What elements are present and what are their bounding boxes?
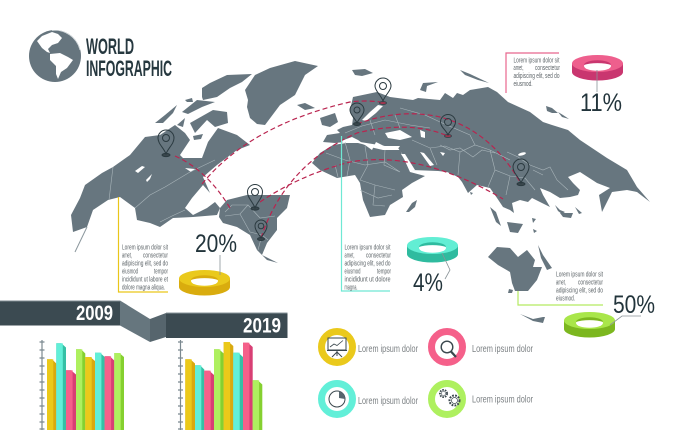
legend item: chart bbox=[322, 384, 418, 414]
bar chart: 2009 bbox=[40, 340, 124, 430]
map: borders bbox=[109, 108, 568, 250]
text block: teal callout: Lorem ipsum dolor sit bbox=[344, 244, 391, 252]
text block: teal callout: tempor bbox=[377, 268, 391, 276]
text block: pink callout: amet, bbox=[514, 65, 524, 72]
text block: yellow callout: consectetur bbox=[143, 252, 168, 260]
text block: green callout: eiusmod. bbox=[556, 296, 575, 302]
yellow callout frame bbox=[118, 197, 168, 292]
text block: teal callout bbox=[344, 244, 391, 292]
pin: China bbox=[513, 159, 529, 186]
text block: yellow callout: tempor bbox=[154, 268, 168, 276]
text block: yellow callout: adipiscing elit, sed do bbox=[122, 260, 168, 268]
legend item: chart: Lorem ipsum dolor bbox=[358, 395, 418, 407]
text block: green callout: Lorem ipsum dolor sit bbox=[556, 272, 603, 278]
stat: 4% teal ring: 4% bbox=[413, 269, 443, 297]
text block: pink callout: Lorem ipsum dolor sit bbox=[514, 58, 560, 64]
text block: yellow callout: amet, bbox=[122, 252, 132, 260]
legend item: settings bbox=[432, 384, 533, 414]
icon: magnifier bbox=[432, 332, 462, 362]
icon: gears bbox=[432, 384, 462, 414]
icon: presentation board bbox=[322, 332, 352, 362]
map: inland seas bbox=[135, 105, 526, 182]
stat: 50% green ring: 50% bbox=[613, 291, 655, 319]
text block: yellow callout: Lorem ipsum dolor sit bbox=[122, 244, 168, 252]
text block: yellow callout bbox=[122, 244, 168, 292]
legend item: settings: Lorem ipsum dolor bbox=[472, 394, 533, 406]
text block: teal callout: amet, bbox=[344, 252, 355, 260]
world map bbox=[71, 61, 650, 323]
pin: Scandinavia bbox=[375, 78, 391, 104]
timeline ribbon bbox=[0, 300, 288, 342]
pin: Western Europe bbox=[350, 103, 364, 126]
text block: yellow callout: incididunt ut labore et bbox=[122, 276, 168, 284]
green callout frame bbox=[518, 291, 603, 305]
bar chart: 2019 bbox=[178, 340, 262, 430]
icon: globe bbox=[29, 30, 81, 82]
text block: teal callout: magna. bbox=[344, 284, 358, 292]
legend item: search: Lorem ipsum dolor bbox=[472, 343, 533, 355]
label: 2009: 2009 bbox=[76, 302, 113, 325]
stat: 11% pink ring: 11% bbox=[580, 89, 622, 117]
chart axis bbox=[178, 340, 183, 430]
stat: 11% pink ring bbox=[572, 55, 623, 117]
text block: teal callout: eiusmod bbox=[344, 268, 361, 276]
text block: teal callout: consectetur bbox=[366, 252, 391, 260]
ribbon: 2009 band bbox=[0, 300, 120, 326]
stat: 4% teal ring bbox=[407, 237, 458, 297]
text block: pink callout: eiusmod. bbox=[514, 81, 533, 88]
text block: green callout bbox=[556, 272, 603, 302]
callout frames bbox=[118, 53, 603, 305]
legend item: presentation bbox=[322, 332, 418, 362]
text block: green callout: amet, bbox=[556, 280, 566, 286]
Baja California spit bbox=[75, 227, 87, 252]
text block: green callout: adipiscing elit, sed do bbox=[556, 288, 603, 294]
route arcs bbox=[175, 101, 520, 238]
pin: South America south bbox=[255, 220, 267, 240]
pin: Canada bbox=[158, 130, 174, 157]
map pins bbox=[158, 78, 529, 240]
text block: pink callout bbox=[514, 58, 560, 88]
stat: 20% yellow ring: 20% bbox=[195, 230, 237, 258]
title text: INFOGRAPHIC bbox=[86, 56, 172, 81]
stat: 20% yellow ring bbox=[179, 230, 237, 296]
text block: teal callout: incididunt ut dolore bbox=[344, 276, 391, 284]
text block: yellow callout: eiusmod bbox=[122, 268, 138, 276]
icon: pie chart bbox=[322, 384, 352, 414]
ribbon: 2019 band bbox=[166, 312, 288, 338]
pin: South America north bbox=[248, 184, 262, 210]
title block bbox=[29, 30, 172, 82]
legend item: presentation: Lorem ipsum dolor bbox=[358, 343, 418, 355]
text block: teal callout: adipiscing elit, sed do bbox=[344, 260, 391, 268]
stat: 50% green ring bbox=[564, 291, 655, 338]
text block: pink callout: adipiscing elit, sed do bbox=[514, 73, 560, 80]
legend item: search bbox=[432, 332, 533, 362]
ribbon: fold bbox=[120, 300, 166, 342]
teal callout frame bbox=[342, 136, 390, 291]
text block: green callout: consectetur bbox=[578, 280, 603, 286]
chart axis bbox=[40, 340, 44, 430]
title text bbox=[86, 34, 172, 81]
text block: yellow callout: dolore magna aliqua. bbox=[122, 284, 165, 292]
label: 2019: 2019 bbox=[243, 314, 281, 338]
pink callout frame bbox=[506, 53, 559, 93]
map: landmasses bbox=[71, 61, 650, 323]
title text: WORLD bbox=[86, 34, 134, 59]
text block: pink callout: consectetur bbox=[535, 65, 560, 72]
pin: Russia bbox=[440, 114, 456, 138]
